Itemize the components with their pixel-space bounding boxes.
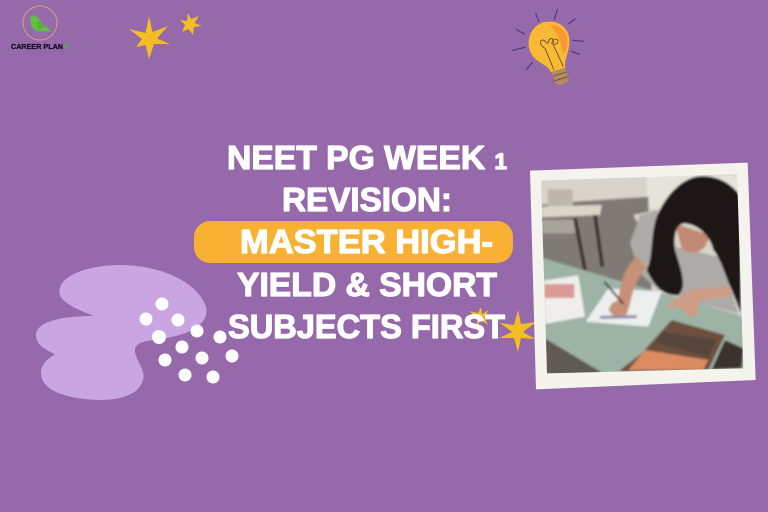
icon: small gold star [180, 13, 202, 35]
icon: green bird [30, 15, 52, 31]
icon: light bulb [513, 10, 583, 85]
book on desk [618, 320, 725, 372]
white frame [530, 163, 756, 389]
room wall [541, 174, 742, 316]
logo green dot [64, 44, 68, 48]
logo wordmark: CAREER PLAN [11, 42, 63, 51]
heading line 1: NEET PG WEEK 1 [227, 139, 507, 176]
chair and side table [548, 189, 573, 207]
icon: small star behind text [469, 307, 489, 327]
heading line 3: MASTER HIGH- [240, 223, 493, 260]
long dark hair [647, 176, 741, 313]
photo: student writing at desk [535, 170, 748, 380]
heading line 5: SUBJECTS FIRST [228, 308, 505, 345]
bulb glass [529, 22, 569, 72]
photo frame [530, 163, 756, 389]
bulb filament [540, 38, 563, 70]
grey shirt [630, 210, 738, 313]
arms and hands [608, 257, 647, 316]
face [675, 223, 710, 252]
white dots cluster [140, 298, 238, 384]
heading [227, 139, 507, 345]
bulb highlight [550, 25, 568, 53]
white card [543, 275, 585, 324]
pencil [604, 282, 623, 304]
decorative blob [36, 265, 207, 400]
green desk [541, 257, 745, 377]
paper [586, 288, 662, 327]
floor [538, 197, 652, 293]
heading line 4: YIELD & SHORT [237, 266, 497, 303]
highlight pill [194, 221, 513, 263]
bulb rays [513, 10, 583, 70]
logo: career plan [11, 6, 68, 51]
icon: star beside photo [499, 310, 536, 352]
heading line 2: REVISION: [282, 181, 452, 218]
bulb base [551, 68, 569, 85]
icon: large gold star [129, 16, 170, 59]
